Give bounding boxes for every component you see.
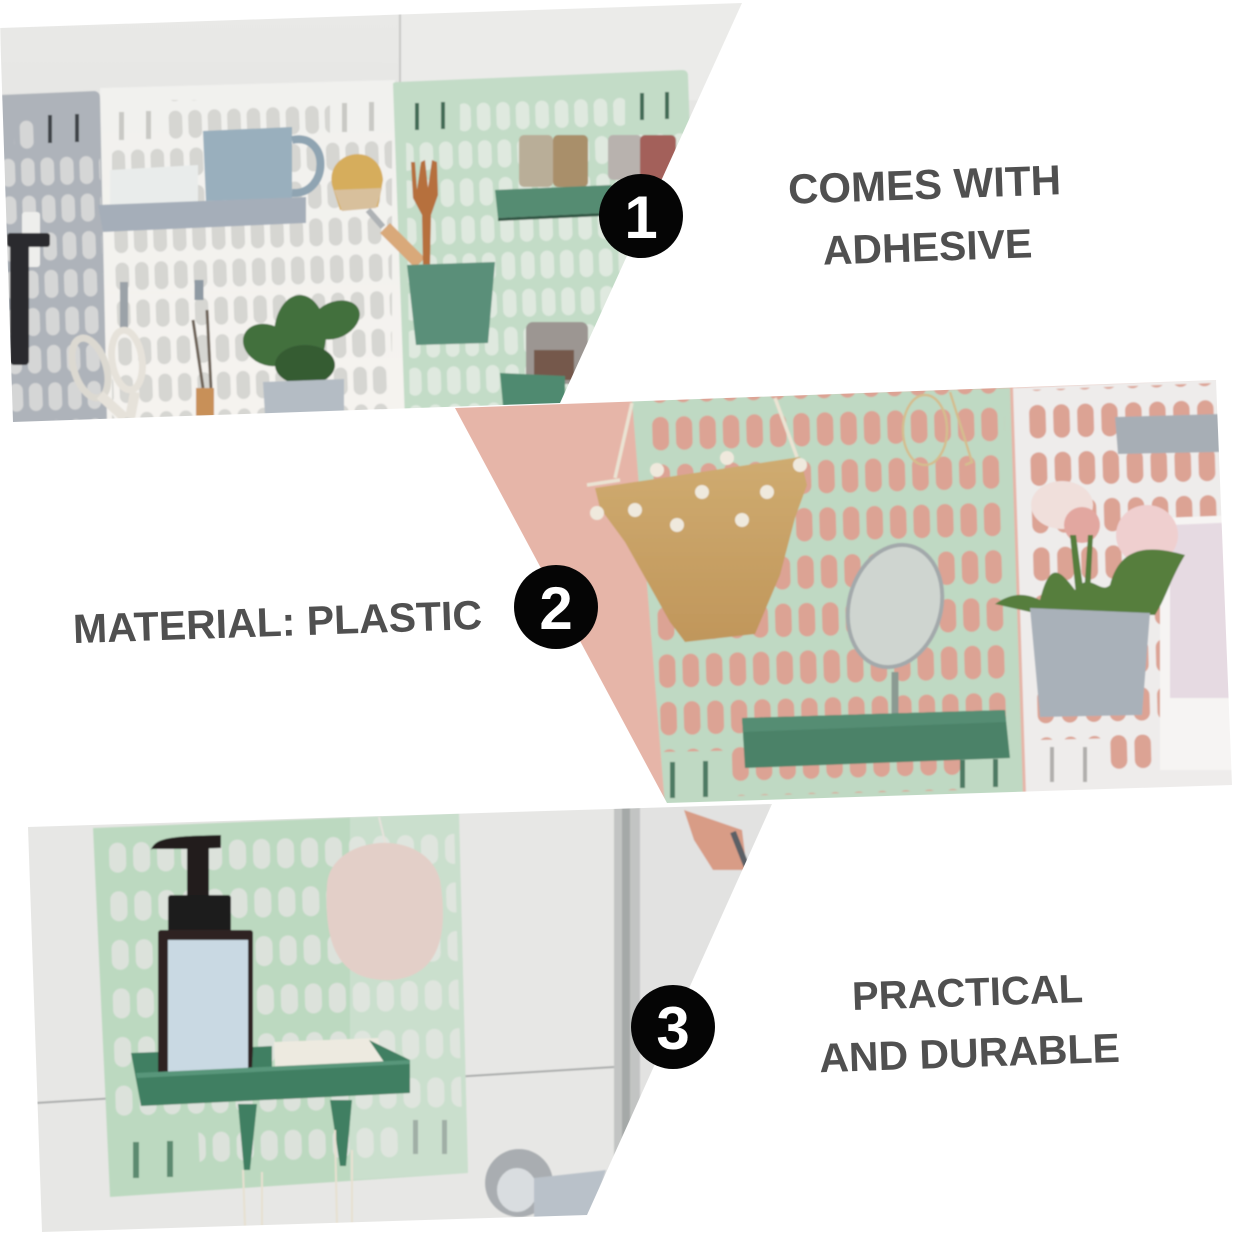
text: practical and durable: AND DURABLE xyxy=(818,1025,1121,1081)
soap xyxy=(274,1038,384,1068)
green tray xyxy=(742,710,1010,768)
faucet xyxy=(485,1149,606,1222)
straw bag xyxy=(595,457,807,642)
fork xyxy=(411,160,438,265)
plant leaves xyxy=(995,535,1185,615)
text: practical and durable xyxy=(818,967,1121,1081)
mug xyxy=(203,127,320,201)
text: material plastic: MATERIAL: PLASTIC xyxy=(72,592,483,652)
green tray xyxy=(131,1040,410,1106)
grey shelf xyxy=(98,197,306,232)
jar bottom xyxy=(526,322,588,384)
green cup xyxy=(407,262,495,345)
plant xyxy=(242,294,361,382)
green shelf xyxy=(495,185,612,221)
photo card xyxy=(1158,515,1229,738)
text: comes with adhesive: COMES WITH xyxy=(787,156,1062,213)
text: practical and durable: PRACTICAL xyxy=(851,967,1084,1019)
scissors xyxy=(65,282,146,418)
number badge 1 xyxy=(599,174,683,258)
text: comes with adhesive: ADHESIVE xyxy=(822,220,1033,274)
grey pot xyxy=(1030,608,1150,717)
grey pot xyxy=(263,379,344,415)
number badge 1: 1 xyxy=(624,184,658,251)
bowls xyxy=(110,165,198,207)
brush xyxy=(331,154,383,211)
tongs xyxy=(193,280,214,416)
glasses xyxy=(903,392,972,465)
number badge 2 xyxy=(514,565,598,649)
straps xyxy=(587,398,797,485)
sponge xyxy=(327,817,443,980)
pearls xyxy=(590,451,807,532)
strings xyxy=(243,1130,352,1226)
panel: photo 1 pegboard with kitchen items xyxy=(0,0,761,430)
pump bottle xyxy=(151,835,253,1075)
panel: photo 3 pegboard in shower xyxy=(20,800,790,1233)
flowers xyxy=(1031,481,1178,565)
mirror stand xyxy=(891,671,900,714)
green pot xyxy=(500,373,565,406)
hooks xyxy=(238,1100,352,1170)
peeler xyxy=(7,212,50,365)
hand xyxy=(684,810,748,870)
wood handle xyxy=(385,228,420,263)
panel: photo 2 pegboard with bag, mirror and plant xyxy=(450,375,1234,810)
mirror xyxy=(845,542,945,670)
grey shelf xyxy=(1115,414,1220,454)
text: comes with adhesive xyxy=(787,156,1062,274)
number badge 3: 3 xyxy=(656,995,690,1062)
number badge 3 xyxy=(631,985,715,1069)
brush handle xyxy=(368,210,383,227)
number badge 2: 2 xyxy=(539,575,573,642)
jars xyxy=(519,135,676,187)
